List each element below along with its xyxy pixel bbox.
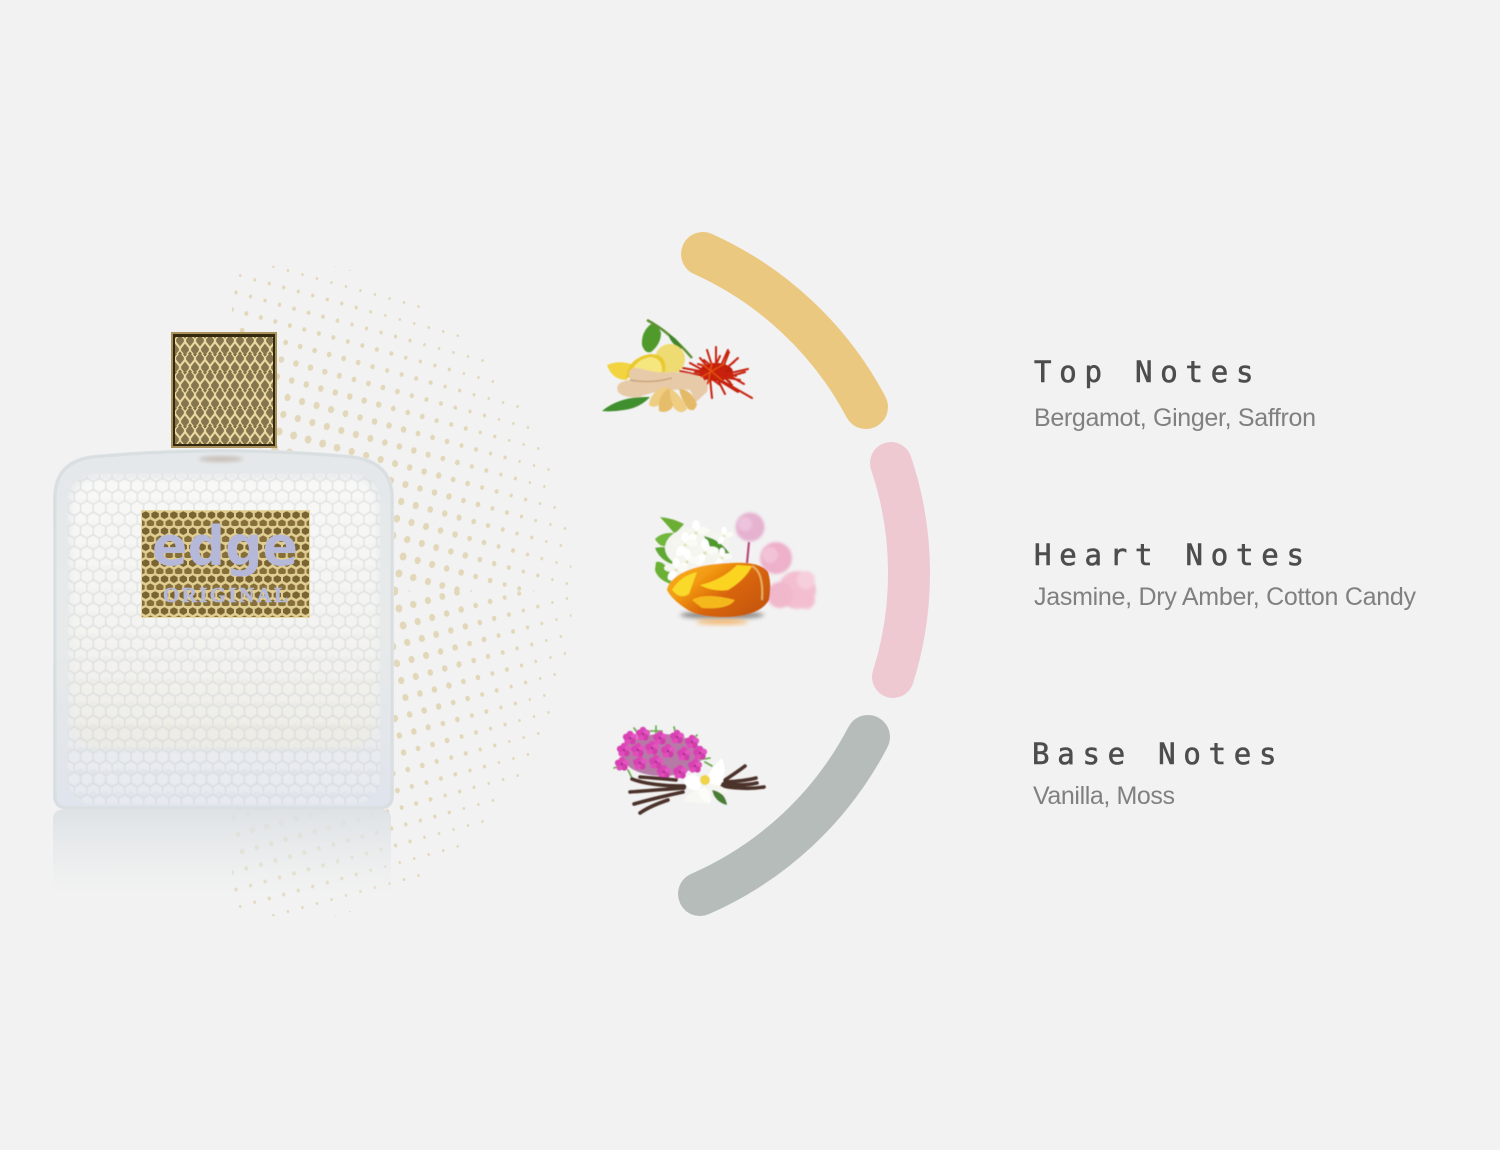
text: base notes ingredients: Vanilla, Moss — [1033, 782, 1175, 810]
bottle body — [53, 449, 394, 810]
icon: pink flowers, jasmine, vanilla pods — [614, 726, 764, 813]
base notes text — [1032, 737, 1276, 810]
heading: top notes: Top Notes — [1034, 355, 1254, 389]
icon: jasmine, amber, cotton candy — [655, 512, 816, 624]
gold label — [141, 510, 310, 618]
bottle reflection — [53, 809, 391, 908]
halftone dot semicircle — [232, 266, 572, 916]
top notes text — [1034, 355, 1316, 432]
heart notes text — [1034, 538, 1416, 611]
heart notes arc — [891, 463, 909, 677]
icon: cotton candy — [736, 512, 816, 609]
text: heart notes ingredients: Jasmine, Dry Amber, Cotton Candy — [1034, 583, 1416, 611]
top notes arc — [703, 254, 866, 407]
text: top notes ingredients: Bergamot, Ginger, Saffron — [1034, 404, 1316, 432]
heading: base notes: Base Notes — [1032, 737, 1276, 771]
heading: heart notes: Heart Notes — [1034, 538, 1304, 572]
base notes arc — [700, 737, 868, 894]
product name: ORIGINAL — [163, 583, 288, 607]
icon: bergamot, ginger, saffron — [602, 320, 752, 412]
brand name: edge — [152, 515, 298, 578]
perfume bottle — [53, 332, 394, 810]
bottle cap — [171, 332, 277, 448]
